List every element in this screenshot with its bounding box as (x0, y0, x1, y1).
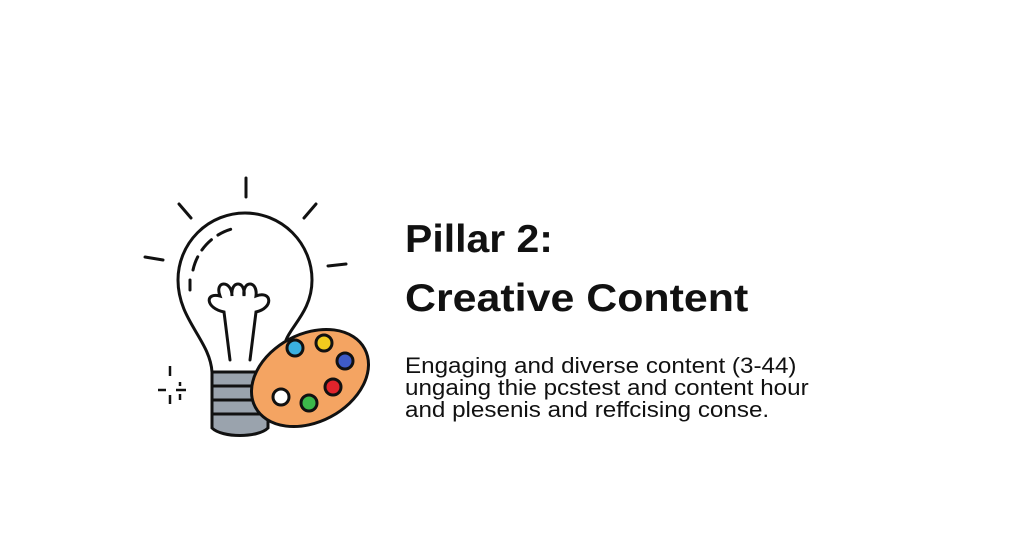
heading: pillar 2: Pillar 2: (405, 218, 553, 261)
heading: creative content: Creative Content (405, 277, 748, 320)
body text: Engaging and diverse content (3-44) (405, 353, 796, 378)
bulb (178, 213, 312, 372)
body text (405, 353, 809, 422)
icon: lightbulb with palette (144, 176, 370, 437)
sparkle (158, 366, 186, 404)
body text: ungaing thie pcstest and content hour (405, 375, 809, 400)
palette (235, 310, 385, 446)
rays (145, 178, 346, 266)
body text: and plesenis and reffcising conse. (405, 397, 769, 422)
base (212, 372, 268, 436)
